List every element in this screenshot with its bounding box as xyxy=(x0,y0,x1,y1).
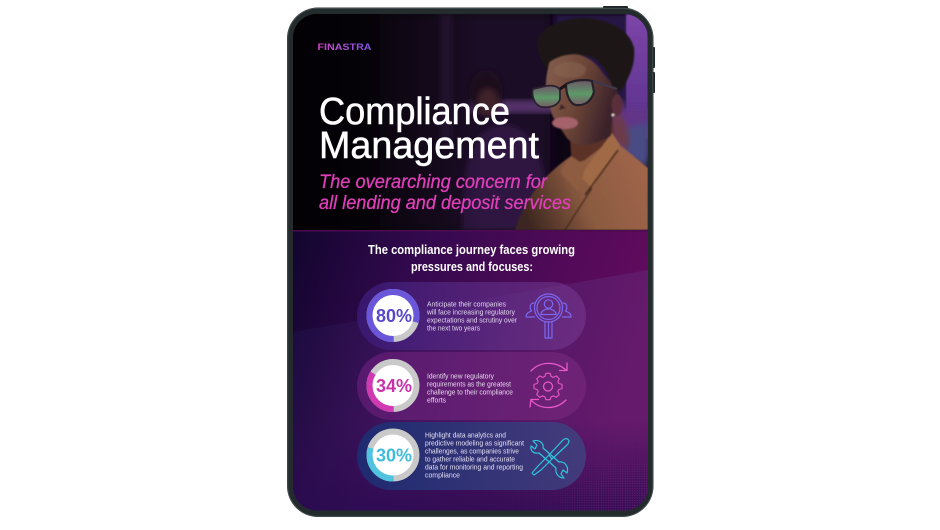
panel: hero photo header xyxy=(293,14,648,230)
title: Management xyxy=(319,125,539,167)
panel: 80% statistic xyxy=(357,282,586,350)
text: 80% description: will face increasing regulatory xyxy=(426,308,515,316)
text: 80% description: the next two years xyxy=(427,324,480,332)
photo: blurred office background xyxy=(384,14,648,230)
text: 34% description: efforts xyxy=(427,396,446,404)
text: 34% description: Identify new regulatory xyxy=(427,372,494,380)
text: 30% description xyxy=(425,430,525,480)
text: 30% description: data for monitoring and reporting xyxy=(425,462,523,472)
text: 34% description xyxy=(427,372,513,404)
panel: lower section background xyxy=(293,230,650,512)
text: 30% description: Highlight data analytics and xyxy=(425,430,506,440)
text: 30% description: challenges, as companies strive xyxy=(425,446,519,456)
section heading: The compliance journey faces growing xyxy=(368,242,575,257)
section heading xyxy=(368,242,575,274)
screen content xyxy=(293,14,650,512)
text: 80% description: expectations and scrutiny over xyxy=(427,316,517,324)
donut chart: 30%: 30% xyxy=(376,446,412,466)
text: 80% description xyxy=(426,300,517,332)
icon: gear with cycle arrows xyxy=(530,363,567,408)
tablet device frame xyxy=(287,6,655,517)
text: 30% description: compliance xyxy=(425,470,460,480)
text: 30% description: predictive modeling as significant xyxy=(425,438,525,448)
donut chart: 34% xyxy=(366,358,420,412)
title xyxy=(319,91,539,167)
text: 34% description: challenge to their compliance xyxy=(427,388,513,396)
section heading: pressures and focuses: xyxy=(411,259,533,274)
donut chart: 80% xyxy=(366,288,420,342)
photo: woman portrait xyxy=(515,18,648,230)
subtitle: The overarching concern for xyxy=(319,171,548,193)
text: 80% description: Anticipate their companies xyxy=(427,300,506,308)
icon: magnifier over person xyxy=(526,294,571,338)
title: Compliance xyxy=(319,91,510,133)
panel: 30% statistic xyxy=(357,422,586,490)
panel: 34% statistic xyxy=(357,352,586,420)
donut chart: 80%: 80% xyxy=(376,306,412,326)
text: 30% description: to gather reliable and accurate xyxy=(425,454,515,464)
icon: crossed wrench and screwdriver xyxy=(531,439,569,478)
text: 34% description: requirements as the greatest xyxy=(427,380,512,388)
subtitle xyxy=(319,171,571,214)
donut chart: 34%: 34% xyxy=(376,376,412,396)
donut chart: 30% xyxy=(366,428,420,482)
subtitle: all lending and deposit services xyxy=(319,192,571,214)
photo: glasses xyxy=(532,80,617,107)
logo: FINASTRA: FINASTRA xyxy=(318,42,372,53)
